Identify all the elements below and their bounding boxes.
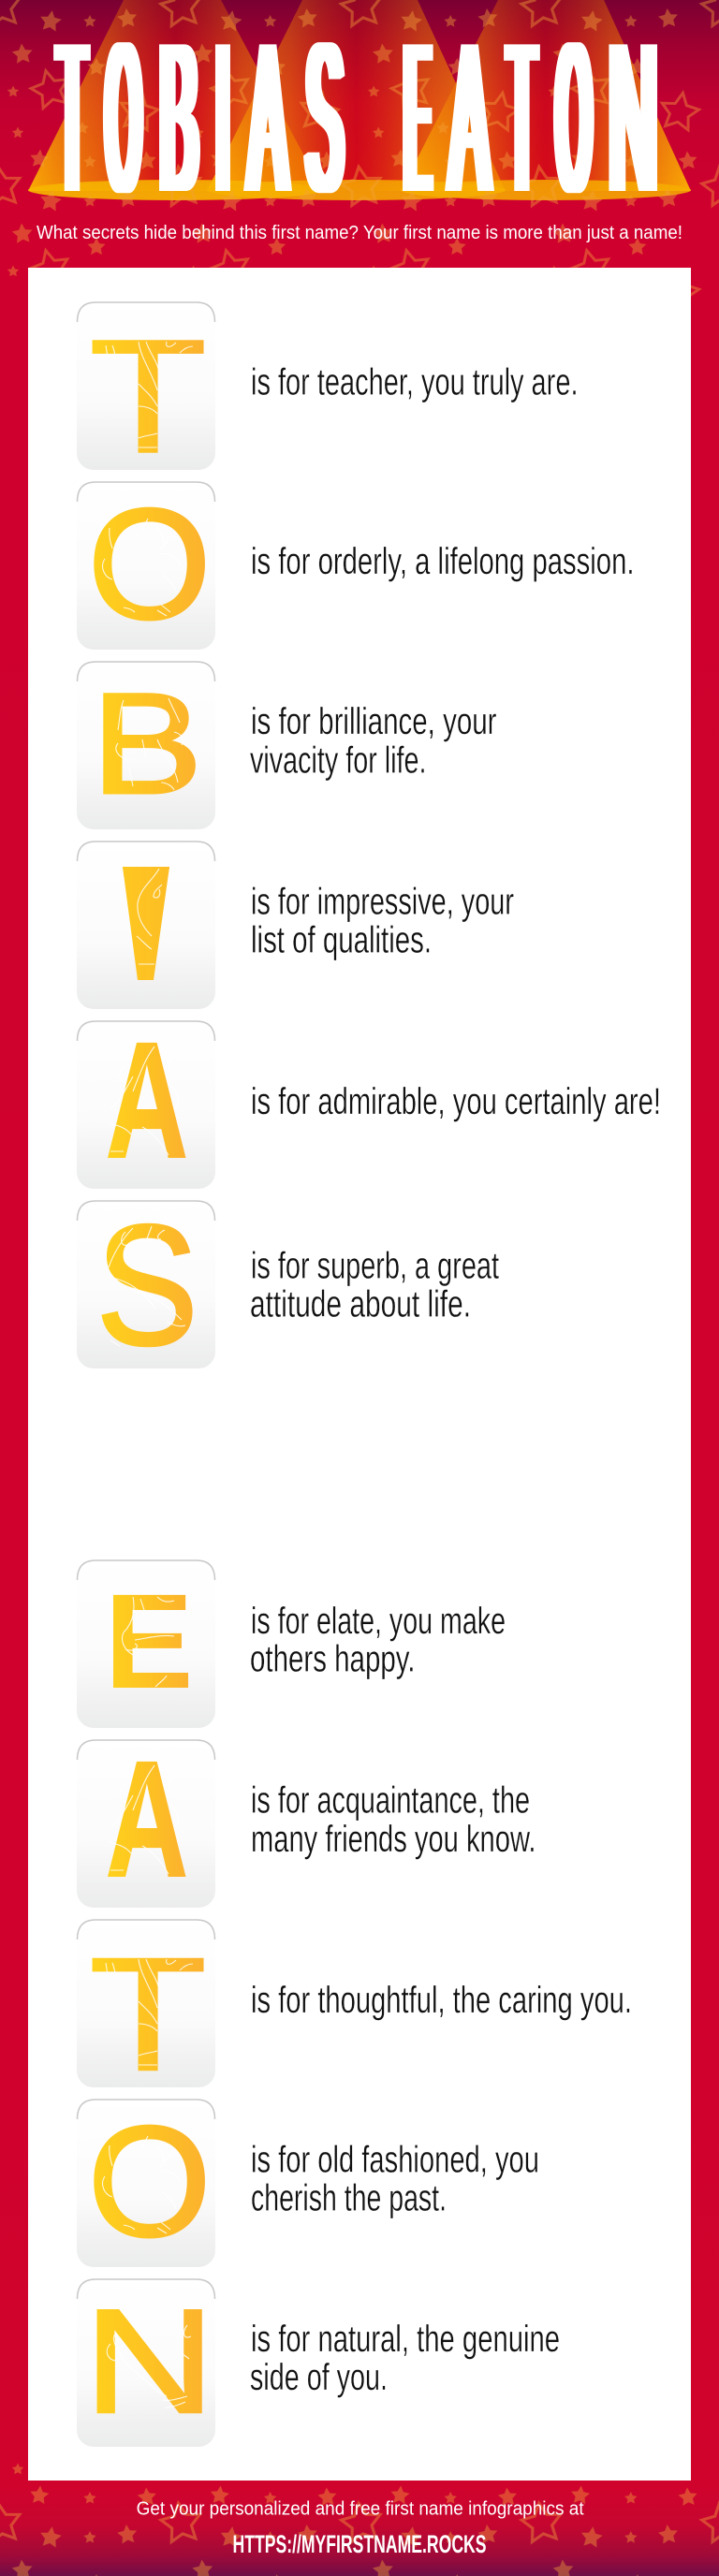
text: I lines <box>251 882 514 961</box>
row: O for orderly <box>77 476 635 651</box>
subtitle: What secrets hide behind this first name? Your first name is more than just a name! <box>37 223 682 243</box>
text: B lines: is for brilliance, your <box>251 701 496 742</box>
tile: A <box>77 1728 215 1911</box>
row: I for impressive <box>76 831 514 1015</box>
title: A <box>249 0 286 237</box>
text: B lines <box>250 701 496 782</box>
text: A lines: many friends you know. <box>251 1819 536 1860</box>
text: S lines <box>250 1246 499 1325</box>
tile: O: O <box>88 476 212 651</box>
text: O lines <box>251 2140 539 2219</box>
title: O <box>107 0 140 236</box>
row: O for old fashioned <box>77 2093 539 2269</box>
star pattern: bottom <box>0 2462 719 2576</box>
text: O lines: is for old fashioned, you <box>251 2140 539 2181</box>
row: N for natural <box>77 2278 560 2447</box>
title <box>58 0 657 237</box>
tile: A <box>77 1009 215 1193</box>
row: A for acquaintance <box>77 1728 536 1911</box>
title: T <box>508 0 536 236</box>
tile: E <box>77 1559 215 1728</box>
tile: B: B <box>91 664 202 824</box>
title: O <box>557 0 591 236</box>
tile: I: I <box>76 831 217 1015</box>
text: I lines: list of qualities. <box>251 920 432 961</box>
footer text: Get your personalized and free first name infographics at <box>137 2499 584 2520</box>
text: A lines: is for acquaintance, the <box>251 1780 530 1822</box>
tile: T: T <box>89 306 207 487</box>
row: T for teacher <box>77 301 579 487</box>
tile: T: T <box>89 1925 207 2105</box>
title: B <box>160 0 198 237</box>
text: B lines: vivacity for life. <box>250 740 427 782</box>
tile: O: O <box>88 2093 212 2269</box>
row: E for elate <box>77 1559 506 1728</box>
tile: N: N <box>83 2278 215 2444</box>
title: T <box>58 0 86 236</box>
tile: A: A <box>106 1009 188 1193</box>
row: B for brilliance <box>77 661 496 829</box>
text: O lines: cherish the past. <box>251 2178 447 2219</box>
title: E <box>405 0 430 237</box>
text: S lines: is for superb, a great <box>251 1246 499 1287</box>
title: S <box>306 0 343 237</box>
title: I <box>217 0 228 237</box>
text: N lines <box>250 2319 560 2398</box>
title: A <box>450 0 489 237</box>
tile: S: S <box>96 1189 198 1381</box>
row: T for thoughtful <box>77 1919 632 2105</box>
text: N lines: is for natural, the genuine <box>251 2319 560 2360</box>
title: N <box>609 0 657 237</box>
star pattern: top <box>0 0 719 298</box>
text: E lines: is for elate, you make <box>251 1601 506 1642</box>
text: N lines: side of you. <box>250 2357 388 2398</box>
row: S for superb <box>77 1189 499 1381</box>
tile: E: E <box>105 1566 194 1717</box>
text: I lines: is for impressive, your <box>251 882 514 923</box>
text: A lines <box>251 1780 536 1860</box>
text: E lines: others happy. <box>250 1639 416 1680</box>
row: A for admirable <box>77 1009 661 1193</box>
spotlights <box>28 0 691 200</box>
text: S lines: attitude about life. <box>250 1284 471 1325</box>
text: T line: is for teacher, you truly are. <box>251 361 579 402</box>
white panel <box>28 268 691 2481</box>
text: E lines <box>250 1601 506 1680</box>
tile: A: A <box>106 1728 188 1911</box>
footer url: HTTPS://MYFIRSTNAME.ROCKS <box>232 2530 487 2558</box>
